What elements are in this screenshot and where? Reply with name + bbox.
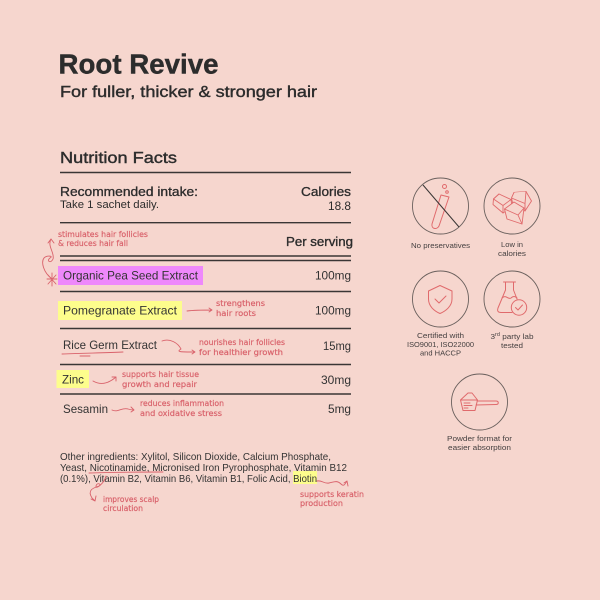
label: powder format: Powder format for bbox=[447, 434, 513, 443]
recommended intake: Recommended intake: bbox=[60, 185, 198, 199]
label: certified: and HACCP bbox=[420, 348, 461, 358]
annotation: improves scalp circulation: improves scalp bbox=[103, 495, 159, 504]
other ingredients: Yeast, Nicotinamide, Micronised Iron Pyrophosphate, Vitamin B12 bbox=[60, 463, 347, 474]
annotation: reduces inflammation: reduces inflammation bbox=[140, 399, 224, 408]
row: rice germ extract: Rice Germ Extract bbox=[63, 338, 158, 352]
row: rice germ extract bbox=[62, 338, 351, 356]
row: pomegranate extract: Pomegranate Extract bbox=[63, 304, 178, 318]
annotation: supports keratin production bbox=[300, 481, 364, 508]
annotation: nourishes hair follicles: nourishes hair follicles bbox=[199, 338, 285, 347]
row: sesamin bbox=[63, 402, 351, 416]
label: third party lab tested: tested bbox=[501, 341, 523, 350]
annotation: reduces inflammation bbox=[112, 399, 224, 418]
label: certified: ISO9001, ISO22000 bbox=[407, 340, 474, 349]
label: powder format bbox=[447, 434, 513, 452]
calories: Calories bbox=[301, 185, 351, 199]
calories: 18.8 bbox=[328, 199, 351, 213]
icon: certified shield bbox=[412, 271, 468, 327]
label: certified bbox=[407, 331, 474, 358]
row: organic pea seed extract: Organic Pea Seed Extract bbox=[63, 268, 199, 282]
row: sesamin: Sesamin bbox=[63, 402, 108, 416]
annotation: supports hair tissue: growth and repair bbox=[122, 380, 198, 389]
per serving: Per serving bbox=[286, 235, 353, 249]
icon: no preservatives bbox=[412, 178, 468, 234]
row: organic pea seed extract bbox=[58, 266, 351, 285]
row: sesamin: 5mg bbox=[328, 402, 351, 416]
row: pomegranate extract: 100mg bbox=[315, 304, 351, 318]
row: zinc: 30mg bbox=[321, 373, 351, 387]
title: Root Revive bbox=[58, 48, 218, 80]
row: zinc bbox=[56, 370, 351, 388]
annotation: nourishes hair follicles bbox=[162, 338, 285, 357]
annotation: supports hair tissue bbox=[93, 370, 199, 389]
label: third party lab tested: 3 bbox=[490, 332, 495, 341]
icon: lab flask bbox=[484, 271, 540, 327]
label: low in calories bbox=[498, 240, 526, 258]
icon: low in calories bbox=[484, 178, 540, 234]
recommended intake bbox=[60, 185, 198, 211]
annotation: stimulates hair follicles bbox=[43, 230, 148, 286]
label: low in calories: calories bbox=[498, 249, 526, 258]
label: third party lab tested: rd bbox=[495, 332, 500, 338]
label: no preservatives: No preservatives bbox=[411, 241, 470, 250]
annotation: improves scalp circulation: circulation bbox=[103, 504, 143, 513]
calories bbox=[301, 185, 351, 213]
row: organic pea seed extract: 100mg bbox=[315, 268, 351, 282]
annotation: improves scalp circulation bbox=[90, 476, 159, 513]
heading: nutrition facts: Nutrition Facts bbox=[60, 150, 177, 167]
annotation: stimulates hair follicles: stimulates hair follicles bbox=[58, 230, 148, 239]
annotation: strengthens hair roots: hair roots bbox=[216, 309, 256, 318]
label: low in calories: Low in bbox=[501, 240, 523, 249]
subtitle: For fuller, thicker & stronger hair bbox=[60, 84, 317, 101]
annotation: strengthens hair roots: strengthens bbox=[216, 299, 265, 308]
annotation: supports keratin production: supports keratin bbox=[300, 490, 364, 499]
label: certified: Certified with bbox=[417, 331, 464, 340]
annotation: reduces inflammation: and oxidative stress bbox=[140, 409, 222, 418]
row: pomegranate extract bbox=[58, 301, 351, 320]
label: powder format: easier absorption bbox=[448, 443, 511, 452]
recommended intake: Take 1 sachet daily. bbox=[60, 199, 159, 211]
label: third party lab tested bbox=[490, 332, 534, 350]
annotation: supports hair tissue: supports hair tissue bbox=[122, 370, 199, 379]
annotation: supports keratin production: production bbox=[300, 499, 343, 508]
annotation: strengthens hair roots bbox=[187, 299, 265, 318]
other ingredients bbox=[60, 452, 347, 485]
row: rice germ extract: 15mg bbox=[323, 339, 351, 353]
other ingredients: Other ingredients: Xylitol, Silicon Dioxide, Calcium Phosphate, bbox=[60, 452, 331, 463]
label: third party lab tested: party lab bbox=[500, 332, 534, 341]
annotation: nourishes hair follicles: for healthier growth bbox=[199, 348, 283, 357]
annotation: stimulates hair follicles: & reduces hair fall bbox=[58, 239, 128, 248]
other ingredients: (0.1%), Vitamin B2, Vitamin B6, Vitamin B1, Folic Acid, Biotin bbox=[60, 474, 317, 485]
row: zinc: Zinc bbox=[62, 372, 84, 386]
icon: powder scoop bbox=[452, 374, 508, 430]
